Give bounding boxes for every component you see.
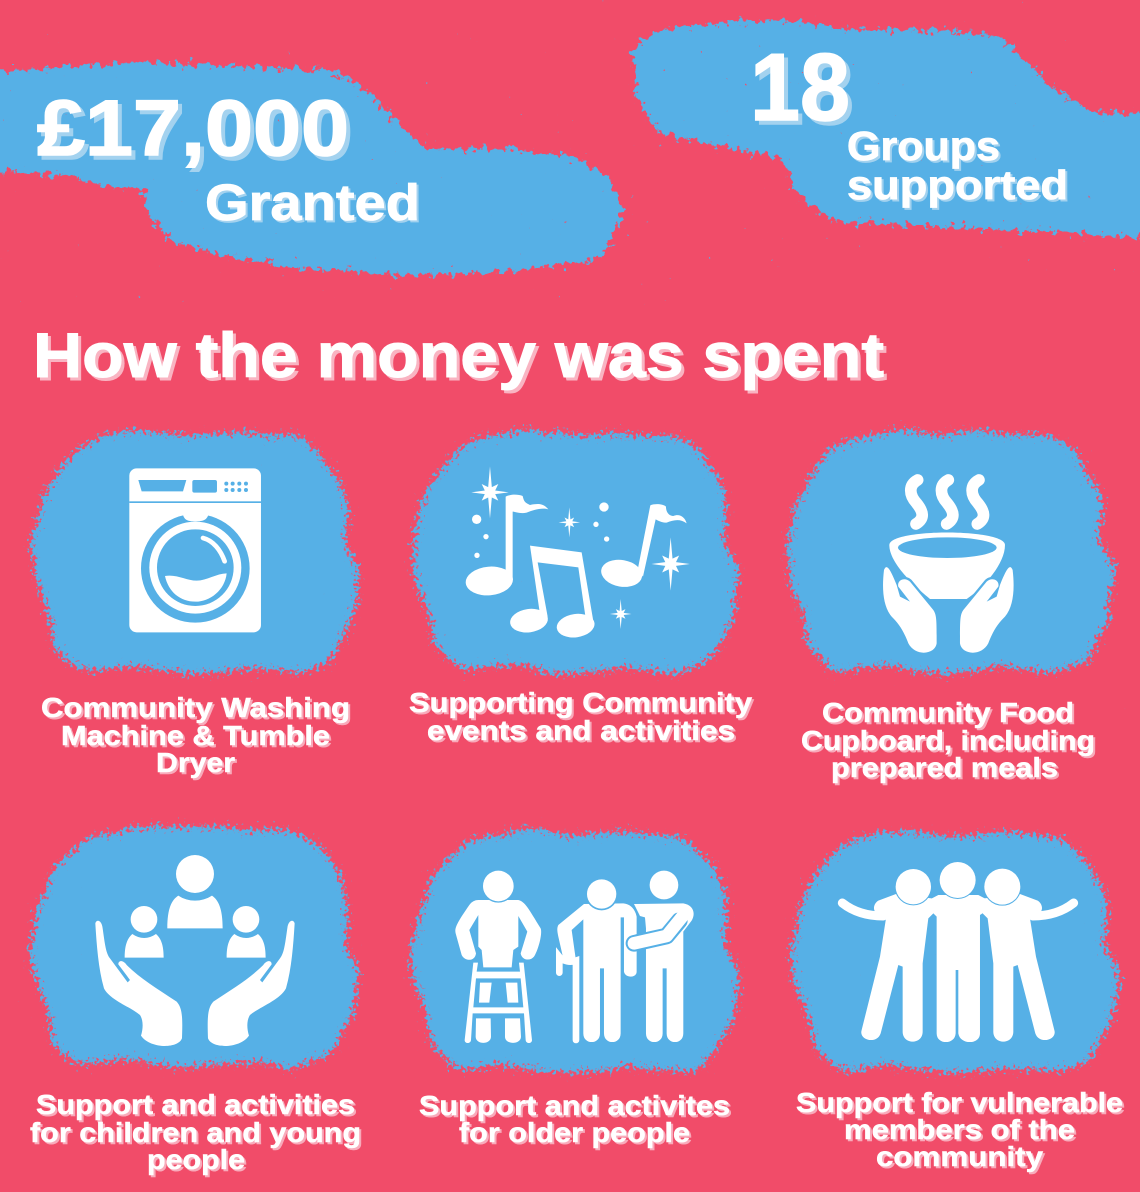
icon: bowl held in hands <box>883 480 1014 653</box>
label: Supporting Community <box>409 687 752 718</box>
panel: groups supported <box>632 20 1140 240</box>
icon: three people embracing <box>842 862 1074 1042</box>
amount: £17,000 <box>37 83 349 172</box>
label: community <box>876 1141 1043 1172</box>
label: Community Washing <box>41 692 350 723</box>
splash <box>31 826 360 1069</box>
label <box>419 1090 730 1148</box>
icon: washing machine <box>129 468 261 632</box>
amount label: Granted <box>205 174 420 231</box>
label: Dryer <box>156 747 235 778</box>
label <box>796 1087 1123 1172</box>
panel: washing machine <box>31 431 360 778</box>
groups label: Groups <box>847 123 1000 169</box>
label: Support and activities <box>36 1089 355 1120</box>
label: Community Food <box>822 697 1074 728</box>
label <box>409 687 752 746</box>
splash <box>31 431 360 674</box>
paint splash: groups supported <box>632 20 1140 240</box>
panel: older people <box>411 831 740 1148</box>
label <box>41 692 350 778</box>
heading: How the money was spent <box>33 321 884 391</box>
label: events and activities <box>427 715 735 746</box>
panel: food cupboard <box>786 431 1115 783</box>
splash <box>786 431 1115 674</box>
group count: 18 <box>750 34 850 141</box>
splash <box>411 831 740 1074</box>
label: Machine & Tumble <box>61 720 330 751</box>
label: Support for vulnerable <box>796 1087 1123 1118</box>
panel: vulnerable members <box>791 831 1123 1172</box>
paint splash: amount granted <box>0 62 624 275</box>
icon: people held in hands <box>95 855 295 1046</box>
splash <box>791 831 1120 1074</box>
panel: amount granted <box>0 62 624 275</box>
splash <box>411 431 740 674</box>
icon: music notes <box>465 466 690 640</box>
label: for children and young <box>30 1117 361 1148</box>
label <box>801 697 1095 783</box>
icon: older people with walker and cane <box>455 871 694 1043</box>
label: prepared meals <box>831 752 1058 783</box>
label: Support and activites <box>419 1090 730 1121</box>
panel: children and young people <box>30 826 361 1175</box>
label <box>30 1089 361 1175</box>
label: members of the <box>844 1114 1075 1145</box>
label: for older people <box>459 1117 690 1148</box>
label: people <box>147 1144 245 1175</box>
label: Cupboard, including <box>801 725 1095 756</box>
panel: groups supported: supported <box>847 162 1068 208</box>
panel: community events <box>409 431 752 746</box>
